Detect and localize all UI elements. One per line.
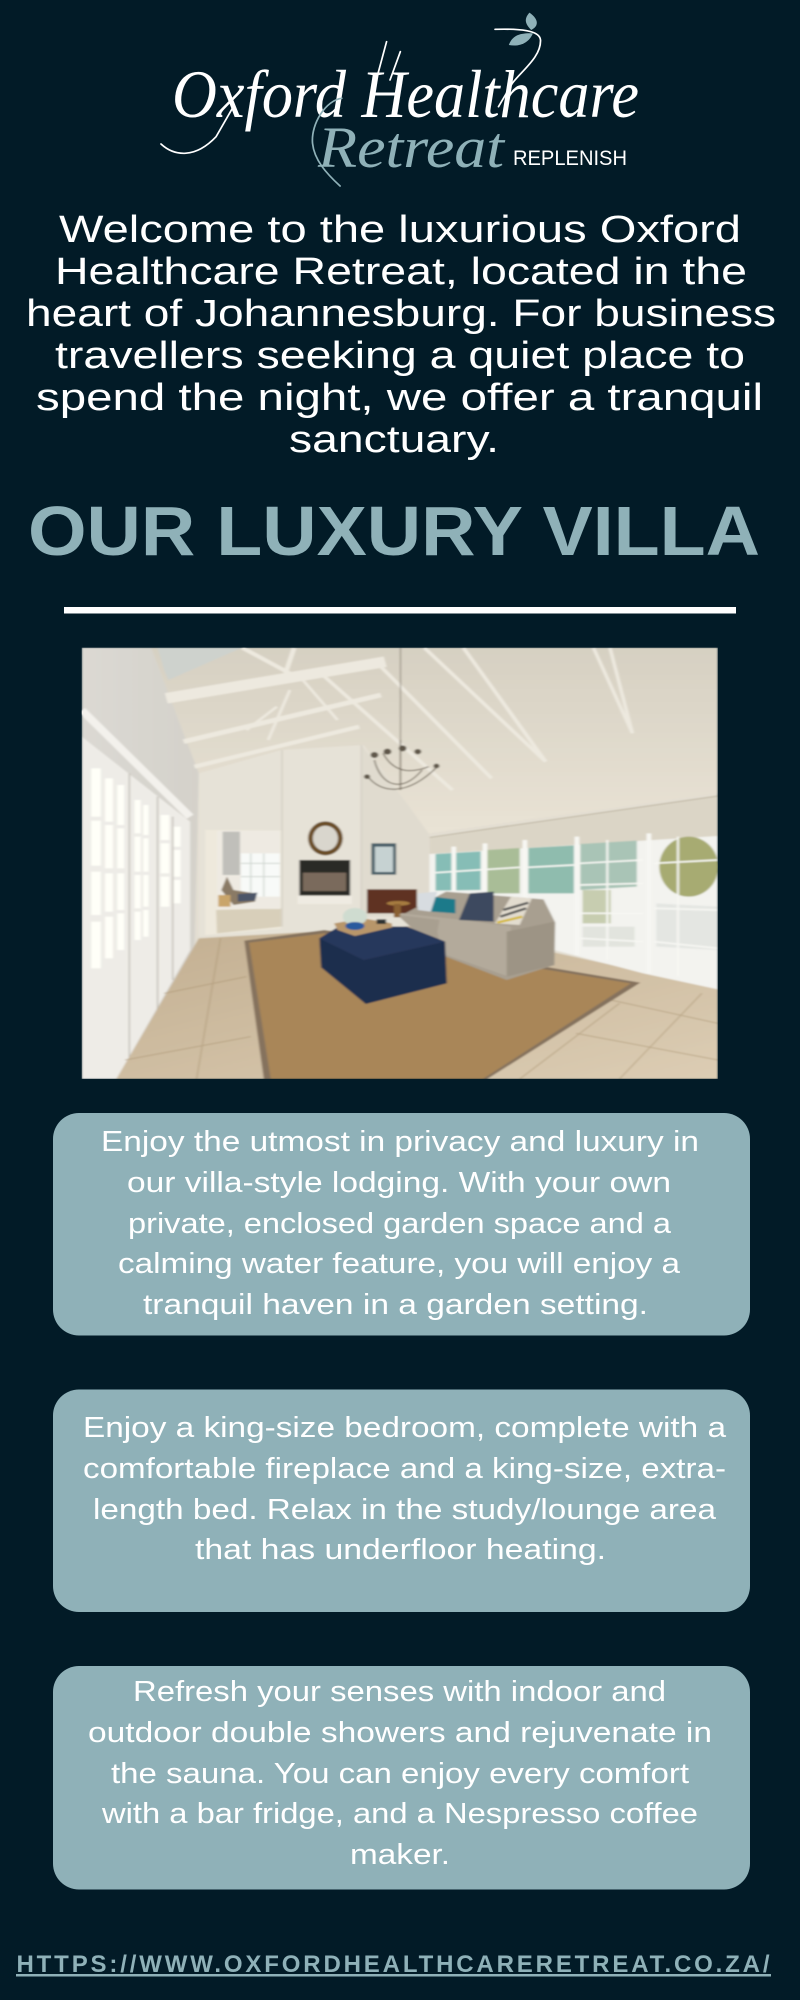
right windows <box>429 836 718 990</box>
logo tagline: REPLENISH <box>513 147 627 170</box>
ottoman <box>318 938 448 1004</box>
ceiling beams <box>166 648 632 790</box>
fireplace <box>299 860 350 896</box>
ceiling <box>152 648 717 722</box>
left door panes <box>91 768 181 968</box>
panel: privacy: private, enclosed garden space and a <box>128 1208 671 1240</box>
skylight <box>158 648 238 678</box>
intro paragraph: travellers seeking a quiet place to <box>55 335 745 377</box>
mirror <box>308 821 343 855</box>
panel: amenities: with a bar fridge, and a Nespresso coffee <box>101 1798 698 1830</box>
panel: privacy: tranquil haven in a garden setting. <box>143 1289 648 1321</box>
panel: privacy: our villa-style lodging. With your own <box>127 1167 671 1199</box>
intro paragraph: sanctuary. <box>289 419 499 461</box>
website link: HTTPS://WWW.OXFORDHEALTHCARERETREAT.CO.ZA/ <box>16 1951 770 1978</box>
left wall <box>82 648 198 950</box>
sideboard <box>367 889 417 913</box>
panel: bedroom: that has underfloor heating. <box>195 1534 606 1566</box>
panel: bedroom <box>53 1390 750 1612</box>
panel: amenities <box>53 1666 750 1890</box>
panel: privacy: Enjoy the utmost in privacy and luxury in <box>101 1126 699 1158</box>
panel: bedroom: Enjoy a king-size bedroom, complete with a <box>83 1412 726 1444</box>
panel: privacy <box>53 1113 750 1336</box>
logo wordmark: Retreat: Retreat <box>317 115 506 180</box>
left doors <box>82 737 190 1079</box>
intro paragraph: Welcome to the luxurious Oxford <box>59 209 741 251</box>
intro paragraph <box>26 209 776 461</box>
back wall <box>222 746 350 768</box>
intro paragraph: Healthcare Retreat, located in the <box>55 251 747 293</box>
sofa <box>399 892 555 980</box>
floor <box>116 925 718 1079</box>
window frames <box>434 832 718 949</box>
doorway <box>205 830 281 935</box>
cushions <box>431 897 456 913</box>
panel: bedroom: length bed. Relax in the study/lounge area <box>93 1494 716 1526</box>
panel: amenities: Refresh your senses with indoor and <box>133 1676 666 1708</box>
panel: amenities: maker. <box>350 1839 450 1871</box>
rug <box>244 930 640 1079</box>
logo <box>161 13 639 186</box>
picture <box>371 843 396 875</box>
photo: villa lounge <box>82 648 718 1079</box>
logo flourishes and leaves <box>160 12 542 187</box>
garden outside <box>436 851 481 891</box>
logo wordmark: Oxford Healthcare: Oxford Healthcare <box>172 56 639 132</box>
intro paragraph: spend the night, we offer a tranquil <box>36 377 763 419</box>
tray and flowers <box>334 918 392 936</box>
heading: OUR LUXURY VILLA <box>28 492 760 570</box>
panel: privacy: calming water feature, you will enjoy a <box>118 1248 680 1280</box>
chandelier <box>368 648 437 790</box>
panel: amenities: the sauna. You can enjoy every comfort <box>111 1758 689 1790</box>
intro paragraph: heart of Johannesburg. For business <box>26 293 776 335</box>
panel: amenities: outdoor double showers and rejuvenate in <box>88 1717 712 1749</box>
panel: bedroom: comfortable fireplace and a king-size, extra- <box>83 1453 726 1485</box>
